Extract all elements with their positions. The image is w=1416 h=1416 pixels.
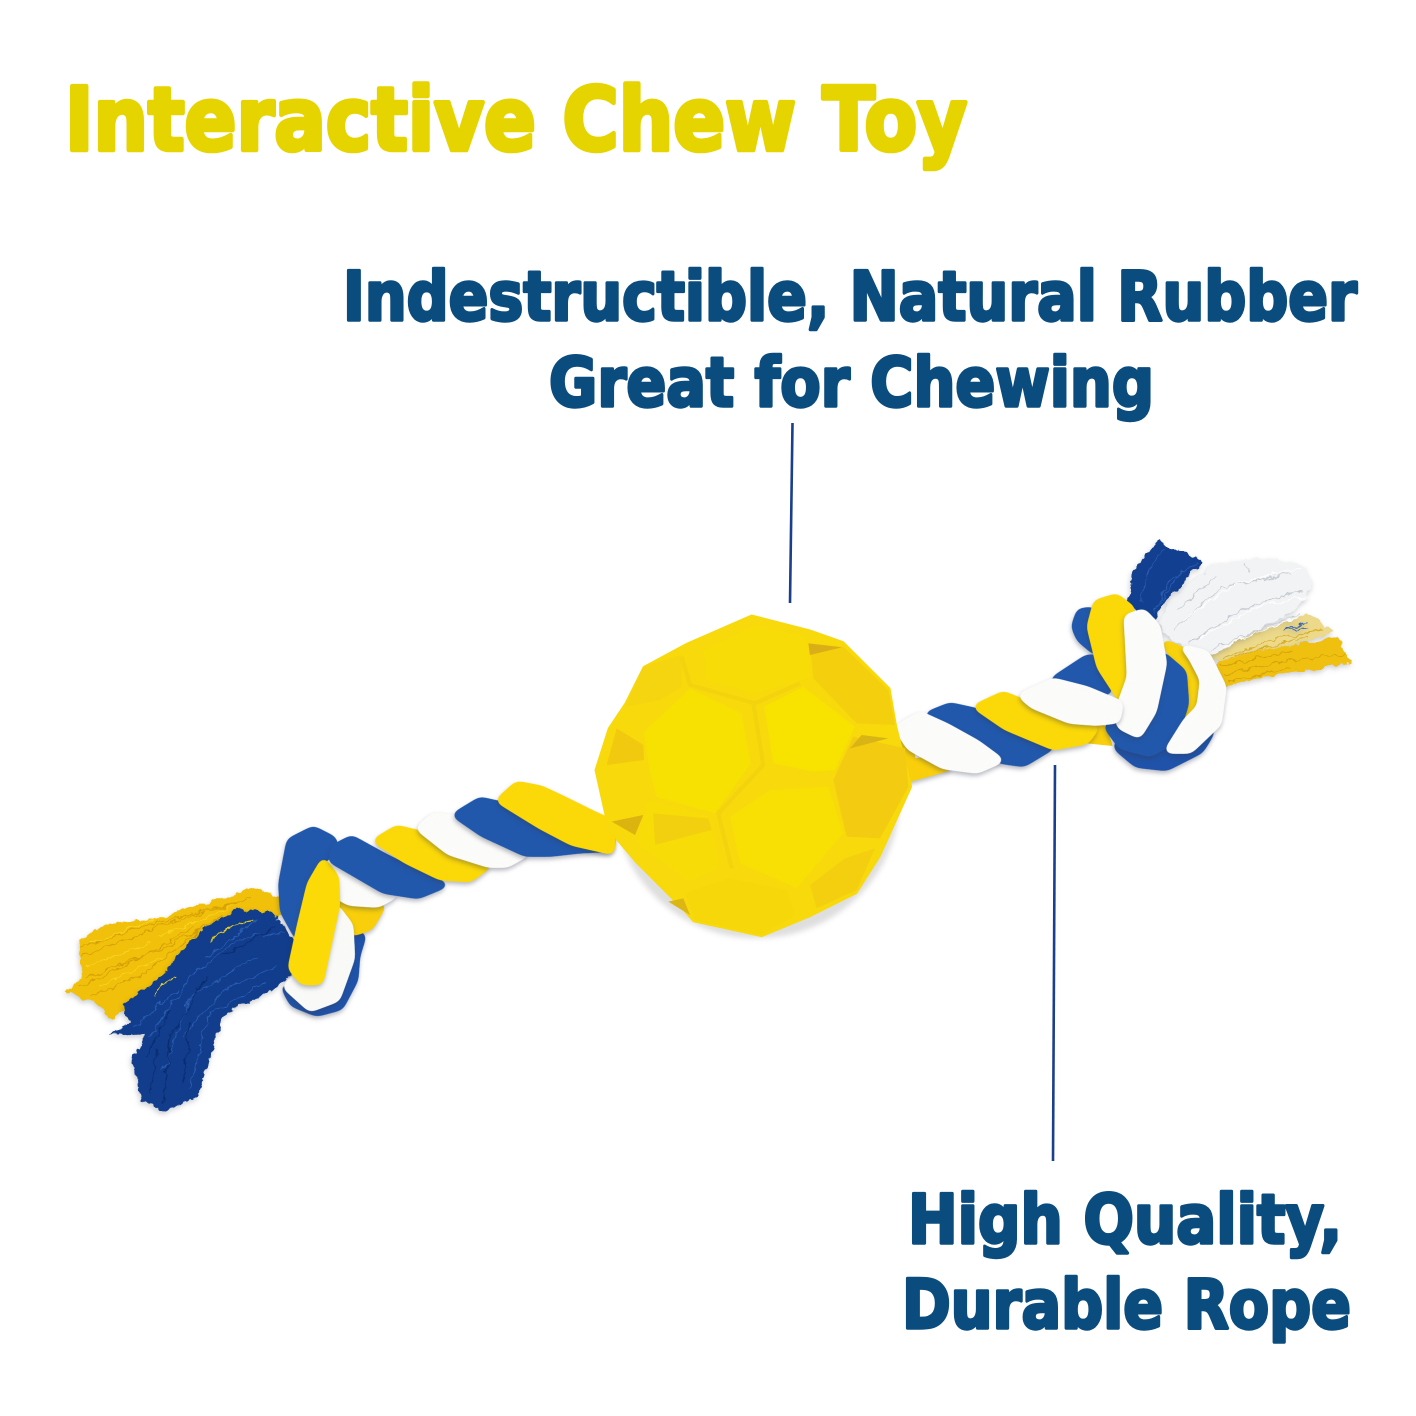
white band right xyxy=(1165,645,1225,752)
blue under strand xyxy=(1053,656,1112,693)
heading: rubber callout: Great for Chewing xyxy=(549,344,1154,423)
right rope end and knot xyxy=(890,539,1349,783)
white loop over xyxy=(1115,610,1165,737)
recess: left xyxy=(607,728,644,765)
left yellow tassel xyxy=(67,888,282,1018)
bump hexagon: right xyxy=(764,687,855,772)
recess: lower xyxy=(685,878,795,935)
leader line: rubber ball xyxy=(790,423,792,603)
left blue tassel xyxy=(110,910,293,1112)
rope core left xyxy=(340,827,570,877)
blue strand xyxy=(329,837,448,897)
yellow strand xyxy=(973,693,1099,749)
ball outline xyxy=(595,615,912,937)
rope core right xyxy=(913,717,1103,743)
white strand left xyxy=(895,713,1003,772)
blue knot bottom xyxy=(1115,725,1218,769)
blue band xyxy=(1105,652,1187,755)
heading: rubber callout xyxy=(343,258,1357,423)
recess: right xyxy=(833,737,908,838)
heading: rope callout: Durable Rope xyxy=(902,1266,1351,1345)
white strand in knot xyxy=(327,858,398,906)
yellow strand over xyxy=(289,858,338,983)
right yellow tassel xyxy=(1215,637,1349,687)
yellow under strand center xyxy=(1087,722,1113,746)
yellow strand xyxy=(497,783,613,853)
small blue loop xyxy=(1073,608,1098,657)
title: Interactive Chew Toy xyxy=(65,69,967,171)
white strand loop xyxy=(283,903,353,1011)
right white tassel xyxy=(1160,558,1312,655)
yellow under strand left xyxy=(890,730,955,783)
recess: lower right xyxy=(810,848,875,908)
ribs between hexagons xyxy=(682,657,800,868)
recess: upper right xyxy=(810,643,895,725)
heading: rope callout xyxy=(902,1181,1351,1345)
yellow strand xyxy=(373,827,492,881)
recess: lower left xyxy=(637,800,720,882)
rope toy illustration xyxy=(67,539,1349,1112)
yellow strand under xyxy=(333,897,385,935)
ball soft shadow xyxy=(613,655,900,938)
blue strand xyxy=(925,704,1055,765)
blue strand xyxy=(453,798,613,855)
recess: upper left xyxy=(625,655,682,707)
blue loop under knot xyxy=(280,927,365,1015)
left rope end and knot xyxy=(67,783,613,1112)
blue loop top xyxy=(280,827,338,942)
yellow band right xyxy=(1162,639,1205,725)
pale yellow threads xyxy=(1208,613,1333,667)
bump hexagon: centre left xyxy=(644,688,751,813)
heading: rope callout: High Quality, xyxy=(908,1181,1342,1260)
right blue tassel xyxy=(1127,539,1203,619)
rubber ball xyxy=(595,615,912,938)
white strand xyxy=(1018,679,1122,724)
yellow loop xyxy=(1088,595,1134,703)
recess: top xyxy=(703,625,810,693)
leader line: rope xyxy=(1053,765,1055,1161)
bump hexagon: bottom right xyxy=(730,787,843,888)
white strand xyxy=(417,814,530,866)
